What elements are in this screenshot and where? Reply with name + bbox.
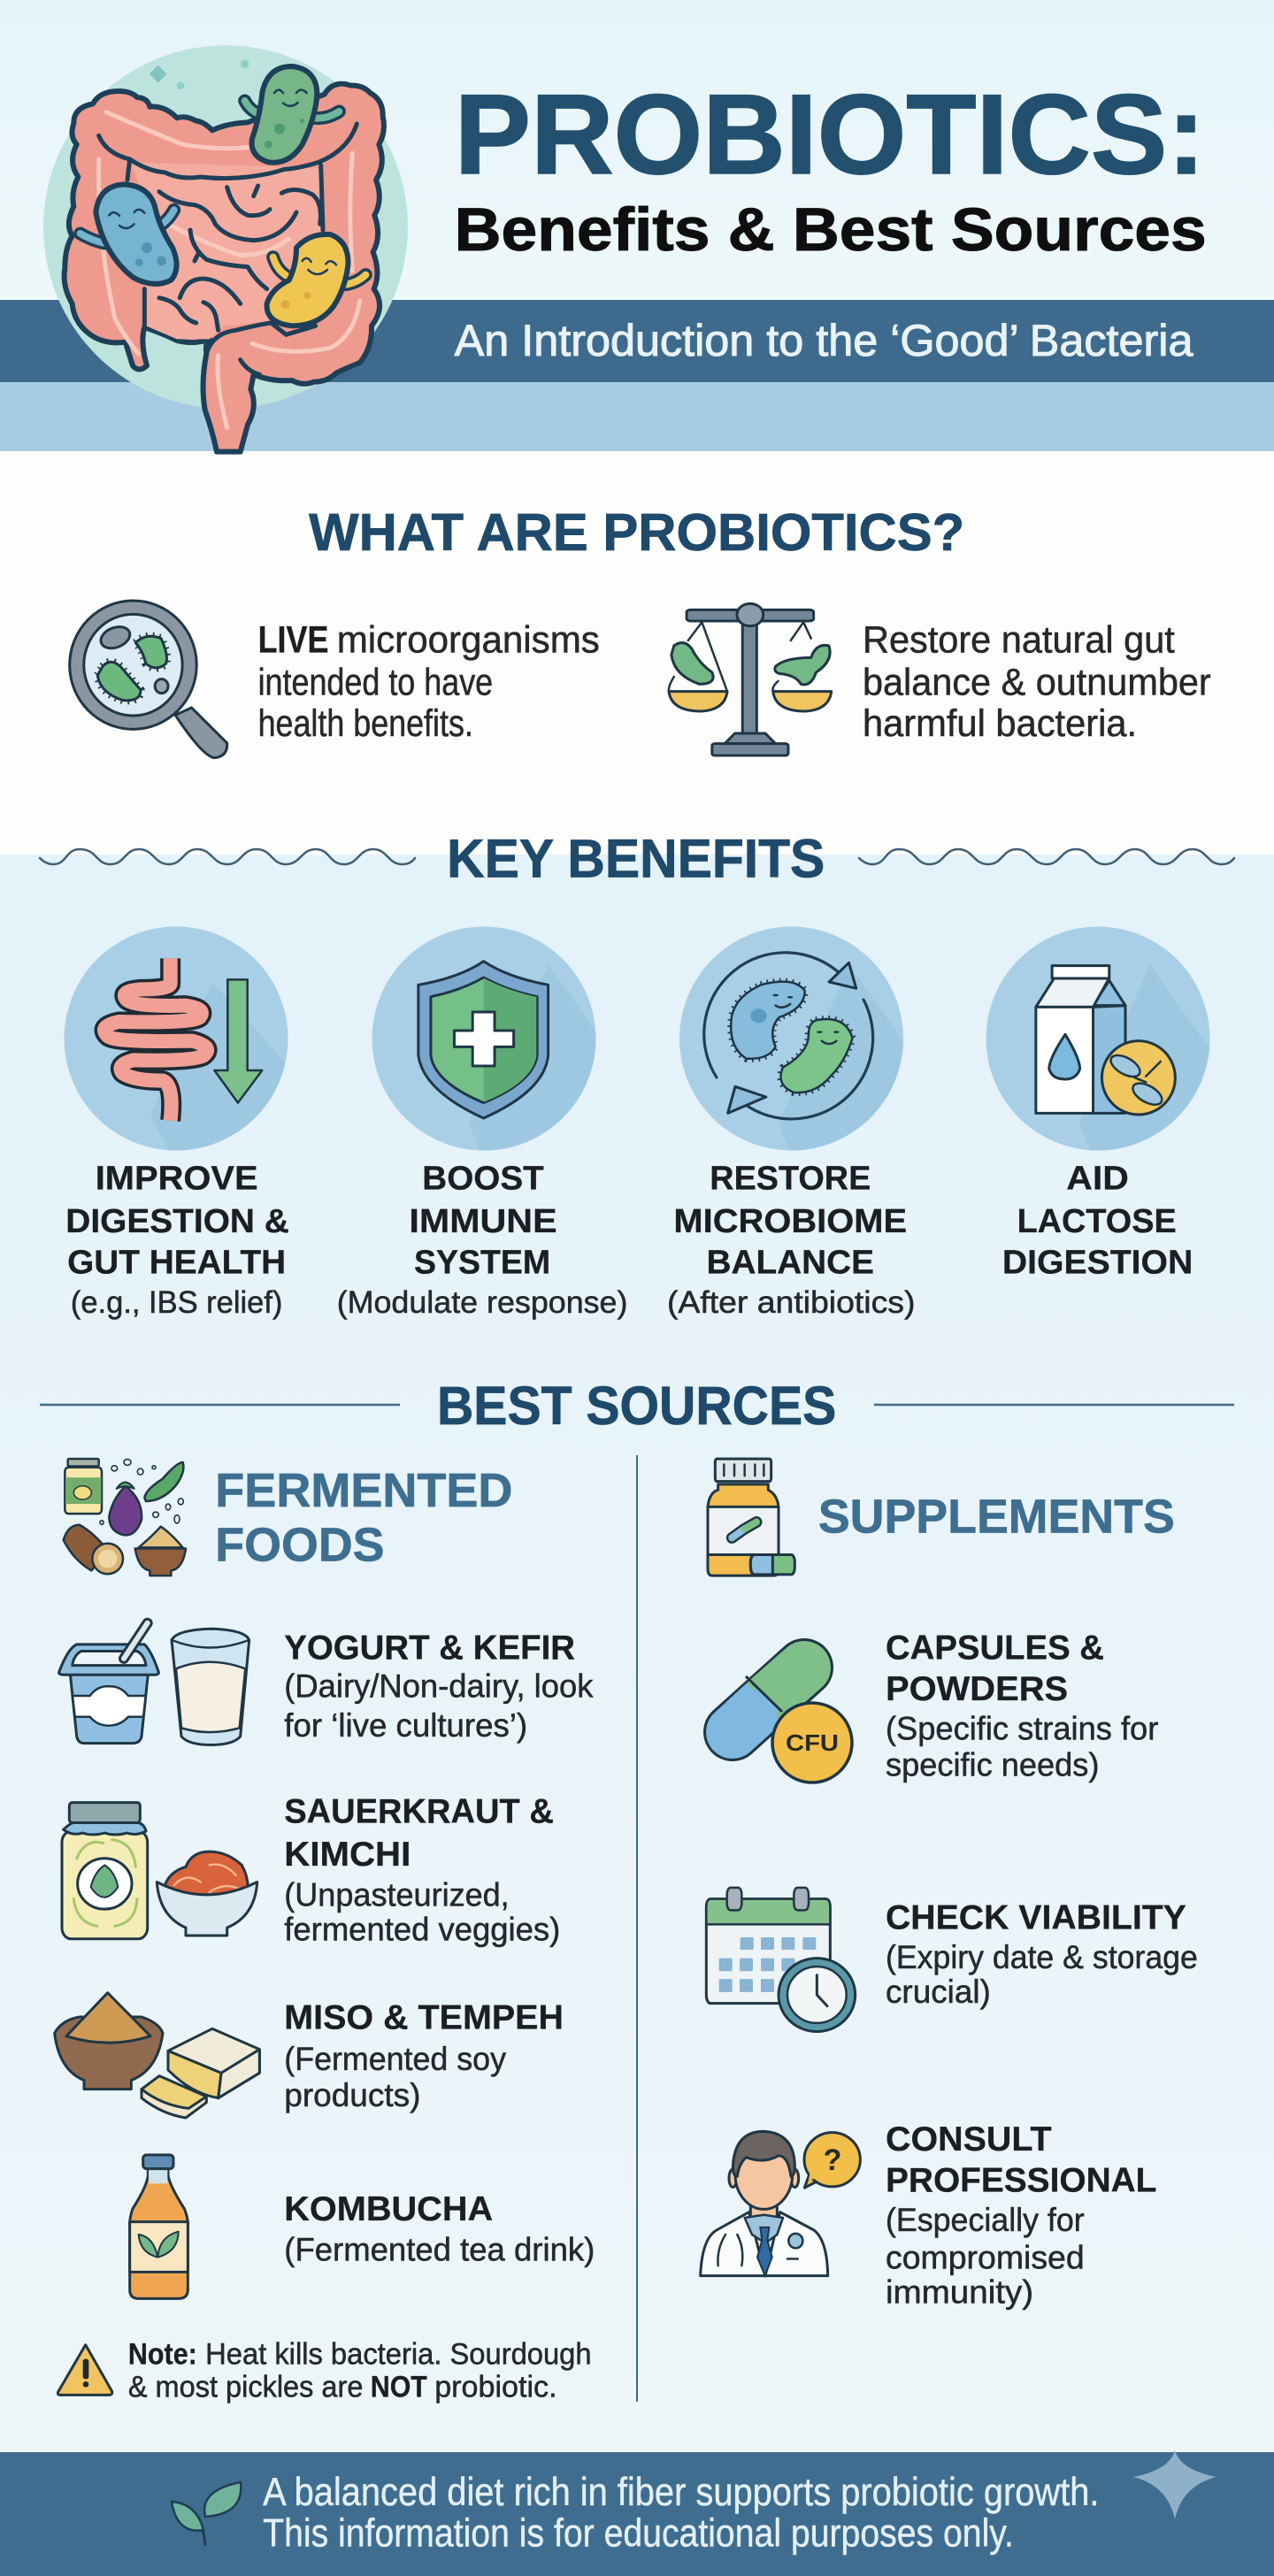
label: improve digestion: DIGESTION & — [65, 1203, 289, 1240]
text: check viability: crucial) — [886, 1973, 991, 2010]
icon: sprout — [172, 2482, 241, 2546]
text: live microorganisms: intended to have — [258, 662, 493, 704]
icon: balance scale with bacteria — [669, 603, 832, 755]
text: yogurt and kefir: (Dairy/Non-dairy, look — [284, 1667, 594, 1704]
note: heat kills bacteria — [128, 2337, 592, 2404]
text: capsules and powders — [886, 1629, 1158, 1783]
text: miso and tempeh — [284, 1999, 564, 2113]
title: PROBIOTICS: — [455, 72, 1205, 198]
heading: fermented foods: FOODS — [215, 1518, 385, 1571]
text: miso and tempeh: (Fermented soy — [284, 2040, 506, 2077]
footer text: This information is for educational purposes only. — [263, 2512, 1014, 2556]
text: live microorganisms: microorganisms — [337, 618, 600, 661]
note: heat kills bacteria: NOT — [371, 2371, 427, 2404]
text: sauerkraut and kimchi: KIMCHI — [284, 1836, 411, 1874]
text: live microorganisms: LIVE — [258, 618, 328, 661]
icon: doctor with question bubble — [701, 2131, 860, 2276]
label: improve digestion — [65, 1161, 289, 1320]
label: restore microbiome — [667, 1161, 915, 1320]
icon: sparkle star — [1133, 2450, 1216, 2519]
icon: yogurt cup and kefir glass — [59, 1623, 249, 1745]
icon: assorted fermented foods — [64, 1459, 186, 1576]
panel: supplements — [701, 1459, 1198, 2311]
bacterium: yellow — [267, 234, 365, 326]
text: consult professional: compromised — [886, 2239, 1085, 2276]
bacterium: blue — [81, 184, 177, 284]
text: yogurt and kefir: for ‘live cultures’) — [284, 1706, 527, 1744]
subtitle: Benefits & Best Sources — [455, 196, 1207, 264]
text: kombucha: KOMBUCHA — [284, 2190, 493, 2228]
text: miso and tempeh: products) — [284, 2076, 420, 2113]
panel: boost immune — [337, 927, 627, 1320]
text: check viability: (Expiry date & storage — [886, 1938, 1198, 1975]
label: boost immune — [337, 1161, 627, 1320]
icon: magnifying glass with microbes — [70, 601, 227, 758]
icon: miso bowl and tempeh — [55, 1993, 259, 2118]
icon: intestine with smiling bacteria — [43, 45, 408, 452]
icon: two bacteria in a cycle — [679, 927, 903, 1150]
label: restore microbiome: MICROBIOME — [673, 1203, 907, 1240]
icon: capsule with CFU coin — [733, 1668, 852, 1782]
note: heat kills bacteria: Heat kills bacteria. Sourdough — [205, 2337, 592, 2371]
icon: gut with down arrow — [64, 927, 288, 1150]
label: aid lactose: LACTOSE — [1017, 1203, 1177, 1240]
panel: restore microbiome — [667, 927, 915, 1320]
footer text — [263, 2471, 1099, 2556]
text: capsules and powders: POWDERS — [886, 1670, 1068, 1708]
label: boost immune: BOOST — [422, 1161, 544, 1198]
footer — [0, 2450, 1274, 2576]
note: heat kills bacteria: probiotic. — [434, 2371, 557, 2404]
light blue band — [0, 382, 1274, 451]
label: restore microbiome: BALANCE — [707, 1244, 874, 1281]
text: sauerkraut and kimchi: fermented veggies) — [284, 1910, 560, 1947]
icon: milk carton with enzyme — [986, 927, 1212, 1168]
icon: calendar and clock — [706, 1888, 856, 2032]
text: consult professional: PROFESSIONAL — [886, 2161, 1156, 2199]
text: consult professional: immunity) — [886, 2273, 1033, 2311]
note: heat kills bacteria: Note: — [128, 2337, 197, 2371]
text: check viability — [886, 1898, 1198, 2010]
text: sauerkraut and kimchi: (Unpasteurized, — [284, 1875, 510, 1913]
small intestine fill — [131, 162, 323, 339]
text: capsules and powders: CAPSULES & — [886, 1629, 1104, 1668]
panel: improve digestion — [64, 927, 301, 1320]
text: live microorganisms: health benefits. — [258, 702, 473, 745]
text: live microorganisms — [258, 618, 600, 745]
text: sauerkraut and kimchi — [284, 1792, 560, 1947]
label: improve digestion: GUT HEALTH — [67, 1244, 286, 1281]
icon: warning triangle — [58, 2345, 112, 2395]
heading: supplements: SUPPLEMENTS — [818, 1491, 1175, 1544]
section heading: what are probiotics: WHAT ARE PROBIOTICS? — [309, 502, 964, 562]
text: kombucha: (Fermented tea drink) — [284, 2230, 595, 2267]
icon: sauerkraut jar and kimchi bowl — [62, 1803, 257, 1939]
text: yogurt and kefir — [284, 1629, 594, 1744]
label: boost immune: SYSTEM — [414, 1244, 550, 1281]
panel: aid lactose — [986, 927, 1212, 1281]
text: miso and tempeh: MISO & TEMPEH — [284, 1999, 564, 2037]
text: check viability: CHECK VIABILITY — [886, 1898, 1186, 1936]
text: restore natural gut balance: Restore natural gut — [863, 618, 1175, 661]
label: restore microbiome: RESTORE — [710, 1161, 871, 1198]
title block — [455, 72, 1207, 365]
text: consult professional: CONSULT — [886, 2120, 1052, 2158]
label: aid lactose: AID — [1066, 1161, 1129, 1198]
heading: fermented foods — [215, 1464, 512, 1571]
text: restore natural gut balance: balance & outnumber — [863, 662, 1211, 704]
label: boost immune: (Modulate response) — [337, 1285, 627, 1320]
text: restore natural gut balance: harmful bacteria. — [863, 702, 1137, 745]
text: consult professional — [886, 2120, 1156, 2311]
icon: supplement bottle — [708, 1459, 794, 1576]
label: restore microbiome: (After antibiotics) — [667, 1285, 915, 1320]
text: yogurt and kefir: YOGURT & KEFIR — [284, 1629, 575, 1668]
panel: fermented foods — [55, 1459, 595, 2404]
tagline: An Introduction to the ‘Good’ Bacteria — [455, 316, 1193, 365]
section heading: best sources: BEST SOURCES — [437, 1376, 836, 1436]
text: restore natural gut balance — [863, 618, 1211, 745]
label: aid lactose — [1002, 1161, 1193, 1281]
text: capsules and powders: specific needs) — [886, 1746, 1099, 1783]
text: sauerkraut and kimchi: SAUERKRAUT & — [284, 1792, 554, 1830]
icon: doctor with question bubble: ? — [824, 2143, 841, 2177]
text: capsules and powders: (Specific strains for — [886, 1710, 1158, 1747]
label: boost immune: IMMUNE — [409, 1203, 557, 1240]
footer text: A balanced diet rich in fiber supports probiotic growth. — [263, 2471, 1099, 2514]
section heading: key benefits: KEY BENEFITS — [447, 829, 825, 889]
label: aid lactose: DIGESTION — [1002, 1244, 1193, 1281]
text: kombucha — [284, 2190, 595, 2267]
label: improve digestion: IMPROVE — [96, 1161, 258, 1198]
subtitle band — [0, 300, 1274, 382]
header banner — [0, 45, 1274, 452]
text: consult professional: (Especially for — [886, 2201, 1085, 2238]
icon: shield with cross — [372, 927, 596, 1150]
heading: fermented foods: FERMENTED — [215, 1464, 512, 1517]
bacterium: green — [245, 66, 339, 163]
icon: kombucha bottle — [130, 2155, 188, 2298]
section heading: key benefits — [40, 829, 1234, 889]
icon: capsule with CFU coin: CFU — [786, 1729, 839, 1756]
note: heat kills bacteria: & most pickles are — [128, 2371, 363, 2404]
label: improve digestion: (e.g., IBS relief) — [71, 1285, 282, 1320]
